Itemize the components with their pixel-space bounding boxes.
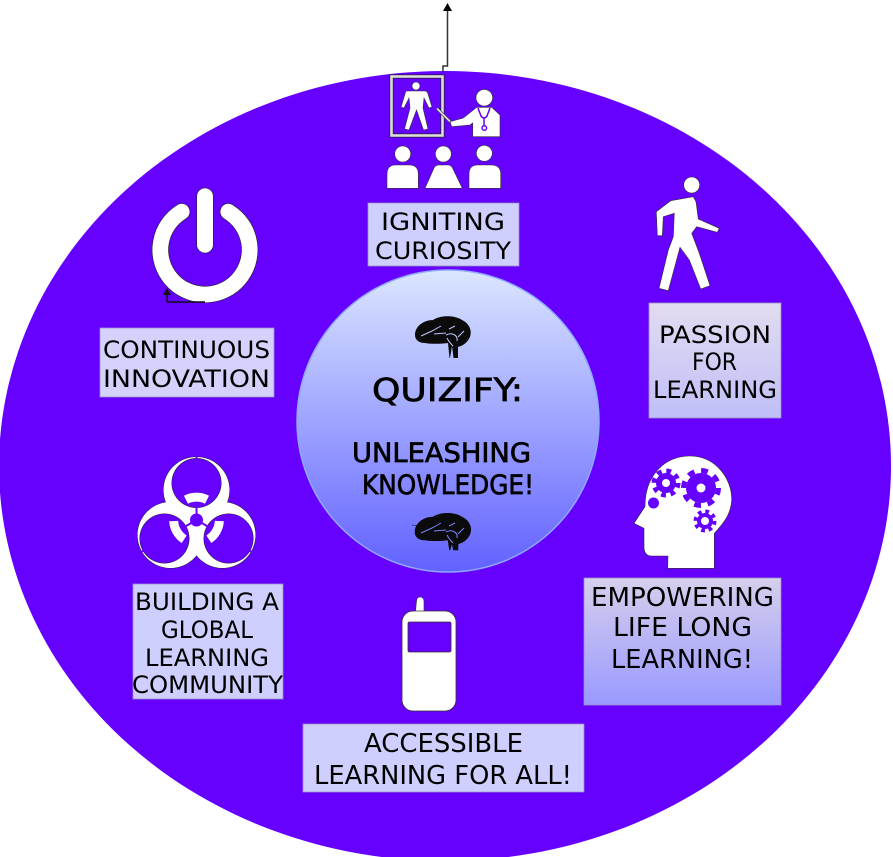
label: empowering life long learning: EMPOWERING [591,583,774,613]
label: building a global learning community: COMMUNITY [132,671,283,699]
label: igniting curiosity: CURIOSITY [375,237,511,265]
label: passion for learning: FOR [692,348,737,376]
label: accessible learning for all [303,724,584,792]
title text: QUIZIFY: [372,371,523,409]
label: passion for learning: PASSION [659,321,771,349]
subtitle text: UNLEASHING [352,438,531,469]
icon part: three audience members [387,145,501,188]
label: continuous innovation [100,328,274,397]
icon: mobile phone [402,597,456,711]
icon: head with gears [634,456,732,568]
icon: brain bottom [412,513,471,550]
label: empowering life long learning [584,578,781,705]
arrow: pointing up from the ellipse [443,3,452,72]
gears [648,470,718,530]
icon: walking person [656,177,719,291]
icon: biohazard symbol [125,456,268,580]
label: accessible learning for all: ACCESSIBLE [364,729,523,759]
subtitle text: KNOWLEDGE! [362,470,534,501]
label: building a global learning community [132,584,283,699]
label: passion for learning: LEARNING [653,376,777,404]
icon: power button [160,188,250,302]
label: accessible learning for all: LEARNING FOR ALL! [314,761,572,791]
label: continuous innovation: CONTINUOUS [103,336,270,364]
label: continuous innovation: INNOVATION [103,365,270,393]
label: empowering life long learning: LEARNING! [611,645,753,675]
icon part: doctor with pointer [437,89,500,137]
subtitle text [352,438,534,501]
label: building a global learning community: GLOBAL [161,616,254,644]
label: igniting curiosity [368,203,519,266]
icon: brain top [415,316,471,358]
label: igniting curiosity: IGNITING [381,208,505,236]
center circle: Quizify title [297,270,599,572]
label: empowering life long learning: LIFE LONG [613,613,752,643]
biohazard ring segments [171,497,222,541]
icon: teacher presenting to audience [387,76,501,188]
label: building a global learning community: LEARNING [145,644,269,672]
label: passion for learning [649,303,781,418]
label: building a global learning community: BUILDING A [135,588,280,616]
biohazard gaps [141,456,252,552]
icon part: framed anatomy chart [392,76,442,136]
